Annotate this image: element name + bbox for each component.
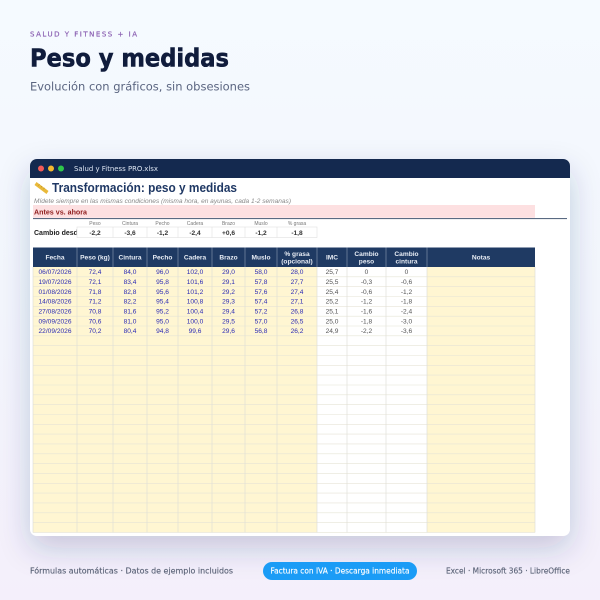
row 09/09/2026: 09/09/2026 — [38, 318, 72, 325]
row 14/08/2026: 82,2 — [124, 299, 137, 306]
sheet note: Mídete siempre en las mismas condiciones (misma hora, en ayunas, cada 1-2 semanas) — [34, 198, 291, 205]
table cell backgrounds — [33, 267, 535, 532]
row 01/08/2026: 82,8 — [124, 289, 137, 296]
row 14/08/2026: 14/08/2026 — [38, 299, 72, 306]
row 09/09/2026: 95,0 — [156, 318, 169, 325]
row 14/08/2026: -1,2 — [361, 299, 373, 306]
row 09/09/2026: 81,0 — [124, 318, 137, 325]
row 22/09/2026: 80,4 — [124, 328, 137, 335]
table header: Notas — [472, 254, 490, 262]
row 01/08/2026: 95,6 — [156, 289, 169, 296]
eyebrow: SALUD Y FITNESS + IA — [30, 30, 137, 38]
row 09/09/2026: 70,6 — [89, 318, 102, 325]
row 19/07/2026: 101,6 — [187, 279, 204, 286]
row 14/08/2026 — [38, 299, 413, 306]
panel: spreadsheet window — [30, 159, 570, 536]
footer badge: Factura con IVA · Descarga inmediata — [270, 566, 410, 576]
row 22/09/2026: 22/09/2026 — [38, 328, 72, 335]
summary row: cambio desde inicio: Brazo — [222, 221, 235, 227]
row 01/08/2026: 101,2 — [187, 289, 204, 296]
row 27/08/2026: 29,4 — [222, 308, 235, 316]
summary row: cambio desde inicio — [34, 221, 317, 238]
row 19/07/2026: 95,8 — [156, 279, 169, 286]
row 22/09/2026: 29,6 — [222, 328, 235, 335]
row 06/07/2026: 72,4 — [89, 269, 102, 276]
footer badge — [263, 562, 417, 580]
row 01/08/2026: 71,8 — [89, 289, 102, 296]
row 01/08/2026: 25,4 — [326, 289, 339, 296]
row 06/07/2026: 58,0 — [255, 269, 268, 276]
table header: (opcional) — [281, 258, 313, 266]
summary row: cambio desde inicio: Peso — [89, 221, 101, 227]
summary row: cambio desde inicio: Cadera — [187, 221, 203, 227]
table header: Brazo — [219, 254, 238, 262]
row 09/09/2026: 100,0 — [187, 318, 204, 325]
row 09/09/2026: -1,8 — [361, 318, 373, 325]
row 27/08/2026: 70,8 — [89, 308, 102, 316]
data table — [33, 248, 535, 532]
table header: Cambio — [354, 251, 379, 258]
subtitle: Evolución con gráficos, sin obsesiones — [30, 80, 250, 94]
row 19/07/2026: -0,6 — [401, 279, 413, 286]
row 27/08/2026: 100,4 — [187, 308, 204, 316]
row 14/08/2026: 95,4 — [156, 299, 169, 306]
row 22/09/2026: 99,6 — [189, 328, 202, 335]
row 01/08/2026: 27,4 — [291, 289, 304, 296]
row 19/07/2026: 19/07/2026 — [38, 279, 72, 286]
row 19/07/2026: -0,3 — [361, 279, 373, 286]
row 06/07/2026: 25,7 — [326, 269, 339, 276]
row 14/08/2026: 57,4 — [255, 299, 268, 306]
table header: Fecha — [45, 254, 65, 262]
row 06/07/2026: 0 — [365, 269, 369, 276]
table header: IMC — [326, 254, 338, 262]
row 06/07/2026: 84,0 — [124, 269, 137, 276]
summary row: cambio desde inicio: Pecho — [155, 221, 170, 227]
table header: Muslo — [251, 254, 271, 262]
table header: Cadera — [184, 254, 207, 262]
row 09/09/2026: 29,5 — [222, 318, 235, 325]
summary row: cambio desde inicio: -1,8 — [291, 230, 303, 237]
row 19/07/2026: 25,5 — [326, 279, 339, 286]
row 14/08/2026: 25,2 — [326, 299, 339, 306]
summary row: cambio desde inicio: -2,4 — [189, 230, 201, 237]
row 22/09/2026: 24,9 — [326, 328, 339, 335]
row 27/08/2026: -2,4 — [401, 308, 413, 316]
row 19/07/2026: 29,1 — [222, 279, 235, 286]
row 01/08/2026: -1,2 — [401, 289, 413, 296]
row 06/07/2026: 102,0 — [187, 269, 204, 276]
row 01/08/2026: 29,2 — [222, 289, 235, 296]
footer left text: Fórmulas automáticas · Datos de ejemplo incluidos — [30, 566, 233, 576]
row 19/07/2026 — [38, 279, 413, 286]
summary row: cambio desde inicio: % grasa — [288, 221, 306, 227]
row 22/09/2026: -3,6 — [401, 328, 413, 335]
row 22/09/2026: 56,8 — [255, 328, 268, 335]
summary row: cambio desde inicio: Muslo — [254, 221, 268, 227]
row 27/08/2026: 95,2 — [156, 308, 169, 316]
row 06/07/2026: 0 — [405, 269, 409, 276]
row 09/09/2026: 25,0 — [326, 318, 339, 325]
sheet heading: Transformación: peso y medidas — [52, 180, 237, 195]
row 27/08/2026 — [38, 308, 413, 316]
row 14/08/2026: -1,8 — [401, 299, 413, 306]
section band: antes vs ahora — [33, 205, 535, 218]
window control dots — [38, 166, 64, 172]
row 01/08/2026 — [38, 289, 413, 296]
row 22/09/2026 — [38, 328, 413, 335]
row 09/09/2026 — [38, 318, 413, 325]
row 27/08/2026: 26,8 — [291, 308, 304, 316]
row 06/07/2026: 28,0 — [291, 269, 304, 276]
table header: Peso (kg) — [80, 254, 110, 262]
row 22/09/2026: 26,2 — [291, 328, 304, 335]
summary row: cambio desde inicio: -2,2 — [89, 230, 101, 237]
summary row: cambio desde inicio: Cambio desde el inicio — [34, 230, 110, 237]
row 01/08/2026: 57,6 — [255, 289, 268, 296]
summary row: cambio desde inicio: -1,2 — [255, 230, 267, 237]
summary row: cambio desde inicio: Cintura — [122, 221, 138, 227]
icon: ruler — [34, 182, 48, 194]
row 06/07/2026: 29,0 — [222, 269, 235, 276]
footer right text: Excel · Microsoft 365 · LibreOffice — [446, 566, 570, 576]
row 27/08/2026: 57,2 — [255, 308, 268, 316]
table header: peso — [359, 258, 374, 266]
table header: Cintura — [118, 254, 142, 262]
row 14/08/2026: 100,8 — [187, 299, 204, 306]
summary row: cambio desde inicio: +0,6 — [222, 230, 235, 237]
row 14/08/2026: 71,2 — [89, 299, 102, 306]
row 19/07/2026: 83,4 — [124, 279, 137, 286]
row 22/09/2026: -2,2 — [361, 328, 373, 335]
row 09/09/2026: -3,0 — [401, 318, 413, 325]
row 09/09/2026: 57,0 — [255, 318, 268, 325]
row 22/09/2026: 94,8 — [156, 328, 169, 335]
row 14/08/2026: 29,3 — [222, 299, 235, 306]
row 19/07/2026: 72,1 — [89, 279, 102, 286]
table header — [33, 248, 535, 267]
row 14/08/2026: 27,1 — [291, 299, 304, 306]
row 27/08/2026: 27/08/2026 — [38, 308, 72, 316]
row 27/08/2026: 81,6 — [124, 308, 137, 316]
title: Peso y medidas — [30, 44, 229, 72]
summary row: cambio desde inicio: -3,6 — [124, 230, 136, 237]
window title bar — [30, 159, 570, 178]
file name: Salud y Fitness PRO.xlsx — [74, 164, 159, 173]
table header: % grasa — [284, 251, 310, 258]
table header: cintura — [396, 258, 418, 266]
row 01/08/2026: 01/08/2026 — [38, 289, 72, 296]
summary row: cambio desde inicio: -1,2 — [157, 230, 169, 237]
row 27/08/2026: -1,6 — [361, 308, 373, 316]
row 09/09/2026: 26,5 — [291, 318, 304, 325]
row 06/07/2026 — [38, 269, 409, 276]
row 27/08/2026: 25,1 — [326, 308, 339, 316]
section band: antes vs ahora: Antes vs. ahora — [34, 209, 87, 216]
row 19/07/2026: 57,8 — [255, 279, 268, 286]
row 01/08/2026: -0,6 — [361, 289, 373, 296]
row 06/07/2026: 06/07/2026 — [38, 269, 72, 276]
table header: Cambio — [394, 251, 419, 258]
row 19/07/2026: 27,7 — [291, 279, 304, 286]
table header: Pecho — [153, 254, 172, 262]
row 22/09/2026: 70,2 — [89, 328, 102, 335]
row 06/07/2026: 96,0 — [156, 269, 169, 276]
